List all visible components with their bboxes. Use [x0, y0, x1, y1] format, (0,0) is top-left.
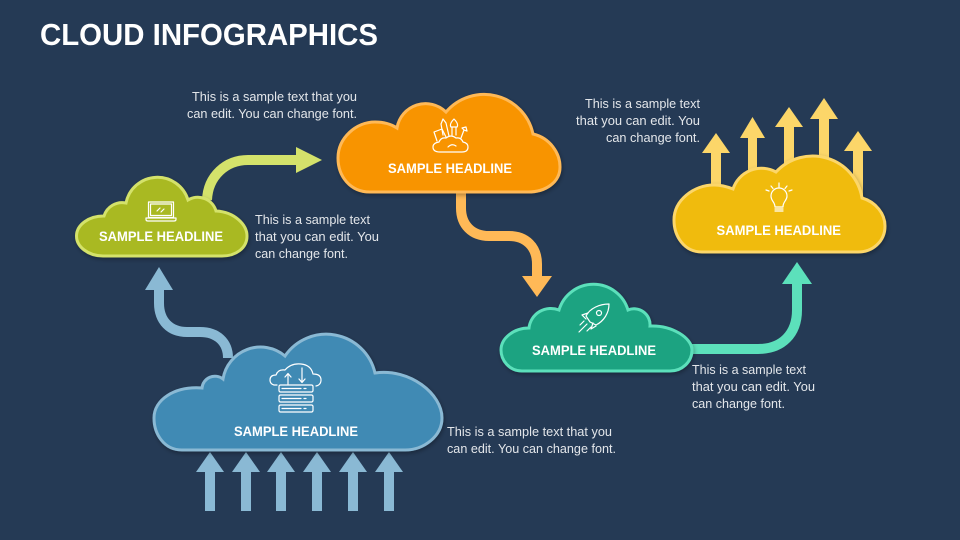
panel: orange cloud — [338, 94, 560, 192]
text block: green cloud note: This is a sample text — [255, 213, 371, 227]
text block: green cloud note: can change font. — [255, 247, 348, 261]
headline: SAMPLE HEADLINE — [532, 342, 656, 358]
headline: SAMPLE HEADLINE — [99, 228, 223, 244]
panel: green cloud — [77, 177, 247, 256]
icon: cloud server — [270, 364, 321, 412]
panel: teal cloud — [501, 284, 692, 371]
title: CLOUD INFOGRAPHICS — [40, 17, 378, 52]
arrows: rising from yellow cloud — [702, 98, 872, 204]
text block: blue cloud note: can edit. You can change font. — [447, 442, 616, 456]
text block: blue cloud note: This is a sample text that you — [447, 425, 612, 439]
text block: yellow cloud note: that you can edit. You — [576, 114, 700, 128]
text block: teal cloud note: can change font. — [692, 397, 785, 411]
text block: teal cloud note — [692, 363, 815, 411]
icon: art tools — [433, 119, 468, 152]
icon: laptop — [146, 202, 176, 221]
panel: blue cloud — [154, 334, 442, 450]
arrow: teal cloud to yellow cloud — [690, 262, 812, 349]
headline: SAMPLE HEADLINE — [234, 423, 358, 439]
text block: yellow cloud note: can change font. — [606, 131, 700, 145]
text block: blue cloud note — [447, 425, 616, 456]
text block: orange cloud note: can edit. You can change font. — [187, 107, 357, 121]
icon: light bulb — [766, 183, 792, 211]
text block: green cloud note: that you can edit. You — [255, 230, 379, 244]
text block: yellow cloud note: This is a sample text — [585, 97, 701, 111]
text block: orange cloud note: This is a sample text that you — [192, 90, 357, 104]
text block: green cloud note — [255, 213, 379, 261]
headline: SAMPLE HEADLINE — [716, 222, 841, 238]
panel: yellow cloud — [674, 156, 885, 252]
arrows: rising into blue cloud — [196, 452, 403, 511]
arrow: green cloud to orange cloud — [207, 147, 322, 200]
text block: yellow cloud note — [576, 97, 701, 145]
icon: rocket — [579, 304, 609, 332]
arrow: orange cloud to teal cloud — [461, 190, 552, 297]
text block: orange cloud note — [187, 90, 357, 121]
arrow: blue cloud to green cloud — [145, 267, 228, 358]
text block: teal cloud note: This is a sample text — [692, 363, 807, 377]
text block: teal cloud note: that you can edit. You — [692, 380, 815, 394]
headline: SAMPLE HEADLINE — [388, 160, 512, 176]
